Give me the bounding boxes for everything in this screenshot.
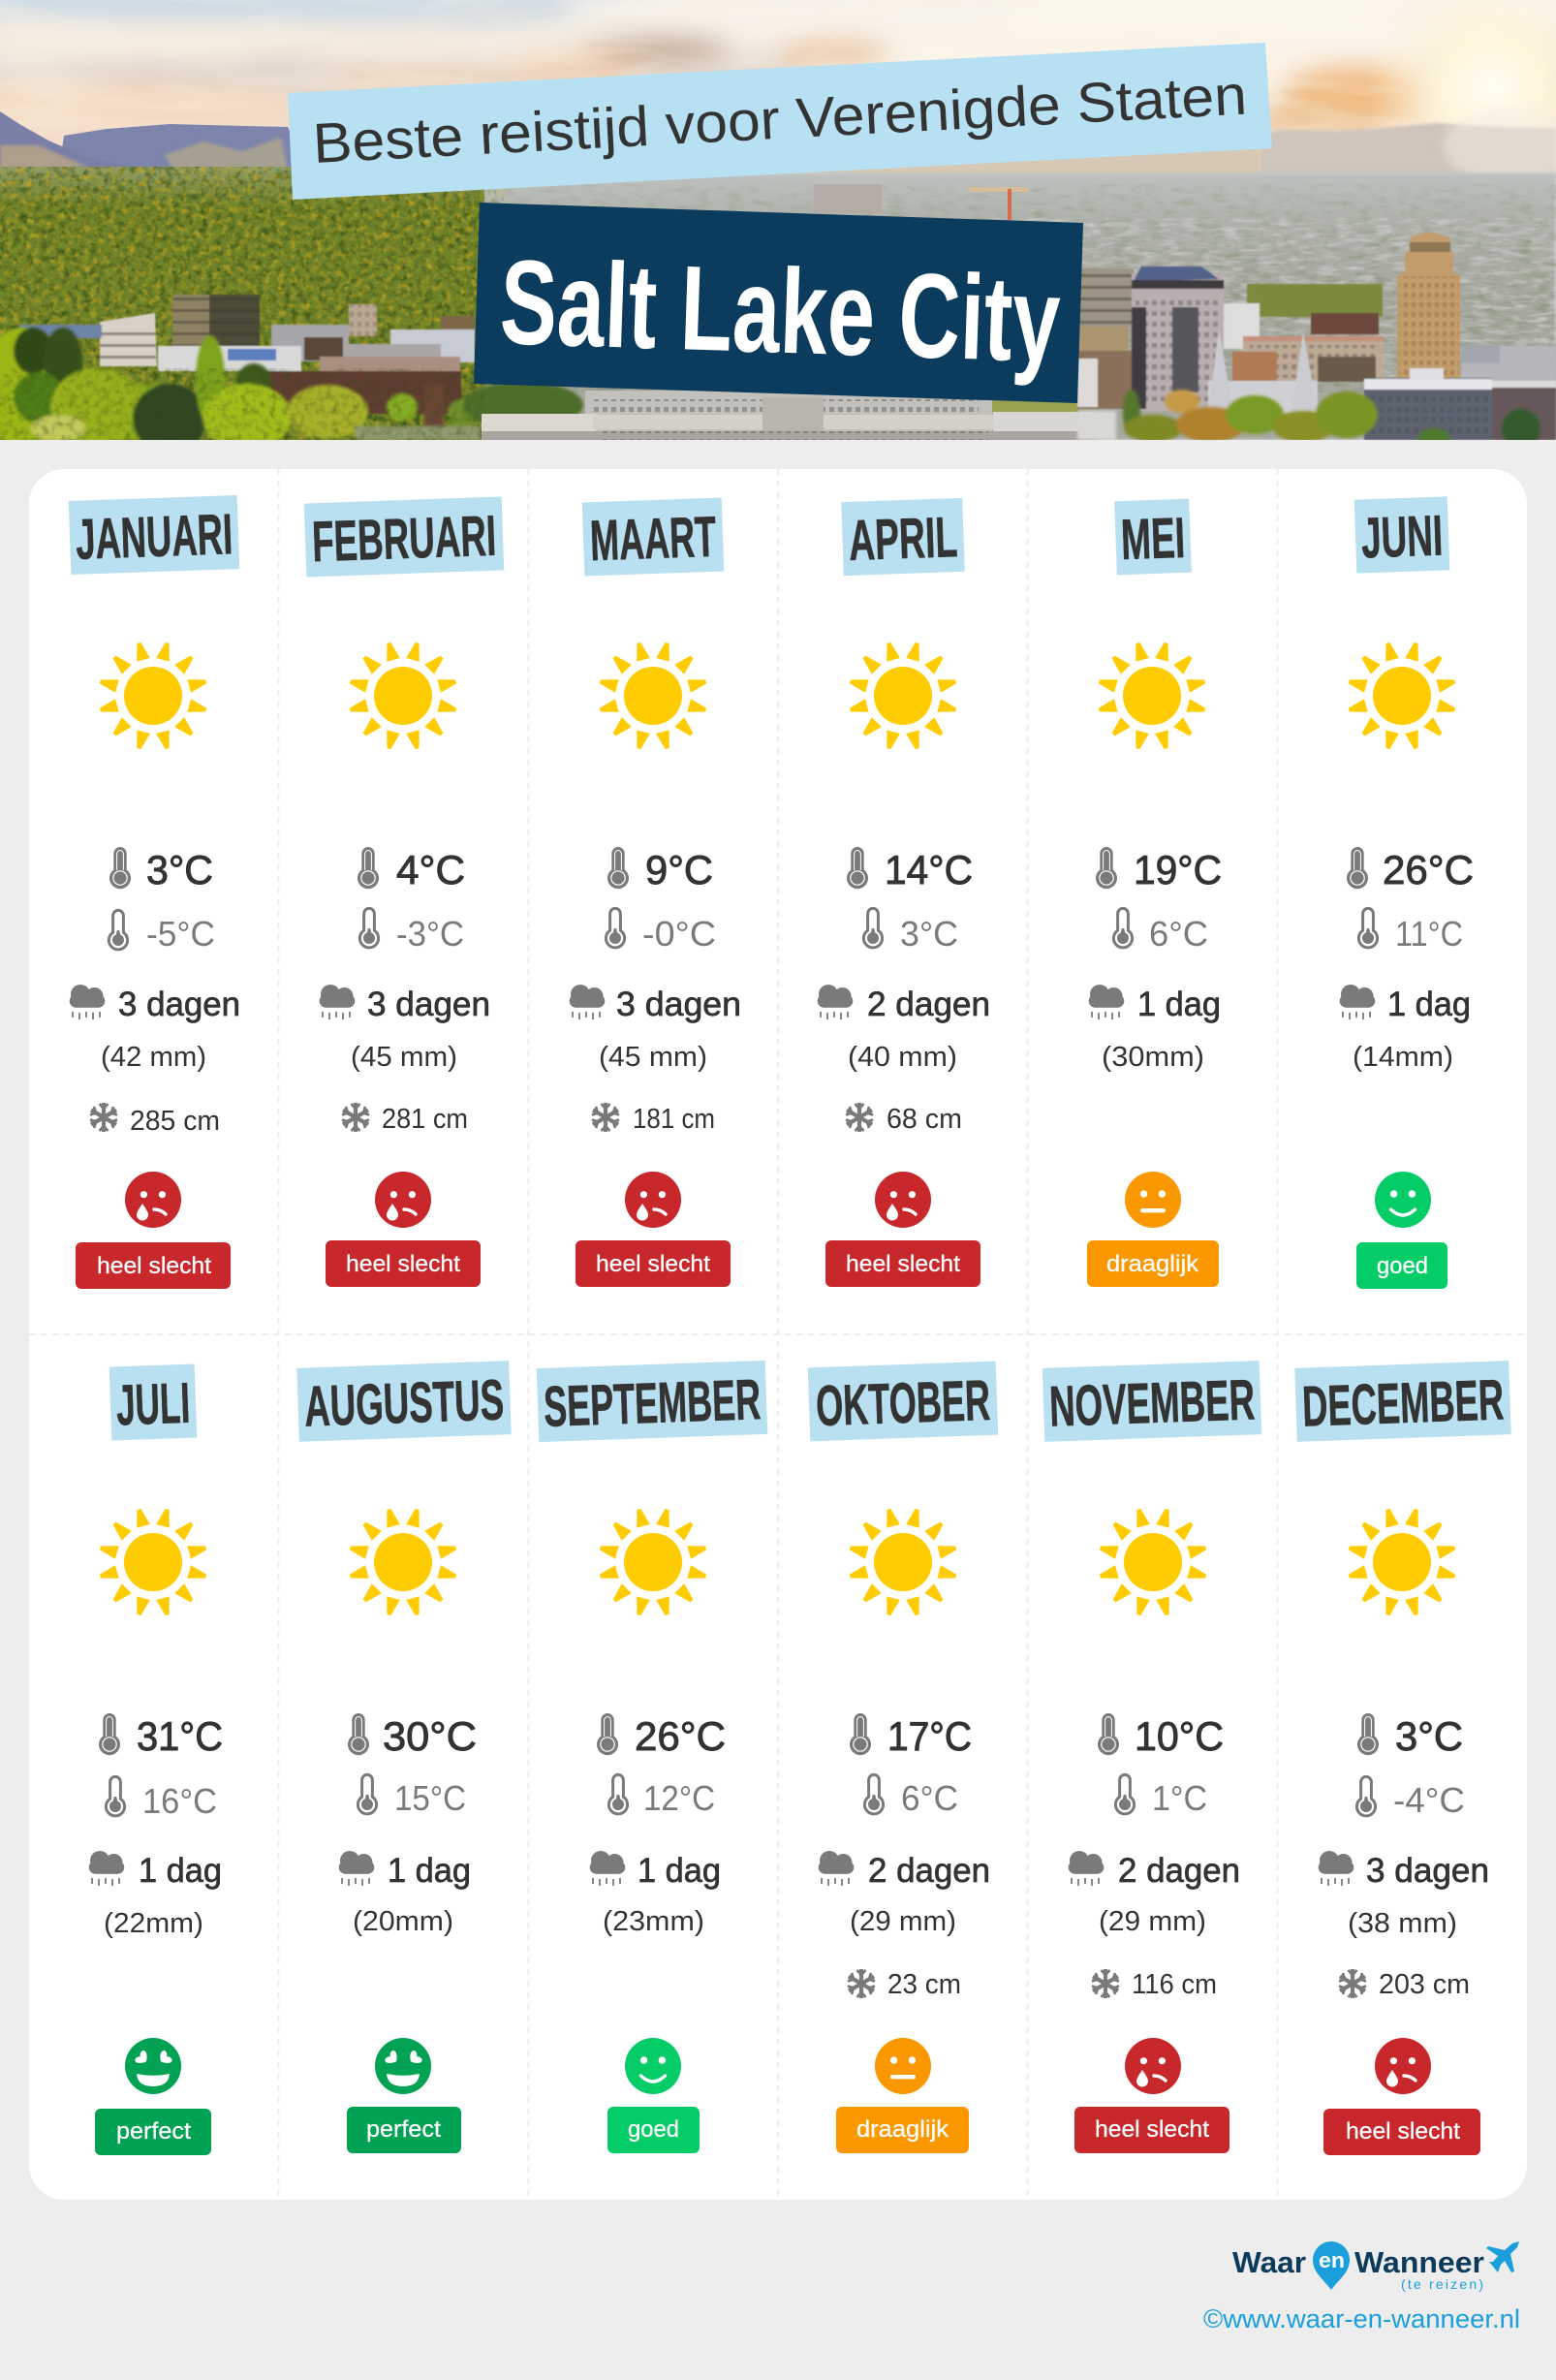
panel: november [1043,1361,1261,2153]
min temperature: 6°C [1149,914,1208,954]
month label: januari [69,495,239,575]
month label: oktober: OKTOBER [815,1368,991,1438]
month label: juli: JULI [115,1371,191,1437]
rainfall: (20mm) [353,1906,453,1937]
month label: oktober [808,1362,998,1441]
max temperature: 3°C [146,847,213,892]
rain days: 2 dagen [1118,1852,1240,1890]
rain days: 2 dagen [868,1852,990,1890]
icon: rain [590,1851,625,1886]
panel: juli [89,1363,223,2155]
max temperature: 19°C [1134,847,1222,892]
logo wordmark right: Wanneer [1354,2245,1484,2279]
min temperature: 15°C [394,1778,466,1818]
max temperature: 26°C [635,1713,726,1759]
rainfall: (14mm) [1353,1042,1453,1073]
trees right foreground [1077,390,1540,448]
rainfall: (40 mm) [848,1042,957,1073]
max temperature: 30°C [383,1713,477,1759]
icon: rating face [1125,2038,1181,2094]
calendar card [29,469,1527,2200]
rain days: 1 dag [638,1852,721,1890]
snowfall: 23 cm [887,1969,961,2000]
snowfall: 116 cm [1132,1969,1217,2000]
website url: ©www.waar-en-wanneer.nl [1203,2304,1520,2333]
icon: map pin [1313,2241,1350,2290]
rainfall: (45 mm) [599,1042,707,1073]
rating badge: heel slecht [846,1251,960,1277]
rating badge [576,1240,731,1287]
rain days: 1 dag [1137,986,1221,1023]
rainfall: (23mm) [603,1906,704,1937]
panel: juni [1340,496,1474,1289]
min temperature: 6°C [901,1778,958,1818]
icon: sun [349,1508,457,1616]
month label: januari: JANUARI [75,502,233,572]
icon: max temperature [1098,1713,1119,1755]
rating badge [1087,1240,1219,1287]
month label: maart [582,498,724,576]
icon: rain [1069,1851,1104,1886]
icon: max temperature [358,847,379,889]
icon: min temperature [1113,908,1133,948]
month label: mei: MEI [1120,506,1186,572]
max temperature: 31°C [137,1713,223,1759]
rain days: 1 dag [1387,986,1471,1023]
header photo: Salt Lake City skyline [0,0,1556,454]
icon: min temperature [106,1776,125,1816]
icon: sun [349,642,457,750]
icon: max temperature [99,1713,120,1755]
min temperature: 1°C [1152,1778,1207,1818]
icon: min temperature [1356,1776,1376,1816]
rating badge [1074,2107,1229,2153]
rating badge [607,2107,700,2153]
rating badge: draaglijk [1106,1251,1199,1277]
icon: min temperature [864,1774,884,1814]
rating badge: heel slecht [1095,2116,1209,2143]
snowfall: 281 cm [382,1104,468,1135]
rainfall: (42 mm) [101,1042,206,1073]
icon: rain [1340,985,1375,1019]
icon: max temperature [1347,847,1368,889]
panel: april [818,498,990,1287]
logo wordmark left: Waar [1232,2245,1306,2279]
icon: min temperature [1115,1774,1135,1814]
rain days: 1 dag [139,1852,222,1890]
snowfall: 181 cm [633,1104,715,1135]
panel: mei [1087,499,1222,1287]
panel: oktober [808,1362,998,2153]
icon: max temperature [847,847,868,889]
min temperature: 16°C [142,1781,217,1821]
rainfall: (38 mm) [1348,1908,1457,1939]
icon: sun [1098,642,1206,750]
snowfall: 203 cm [1379,1969,1470,2000]
snowfall: 285 cm [130,1106,220,1137]
icon: max temperature [607,847,629,889]
max temperature: 17°C [887,1713,972,1759]
panel: december [1294,1361,1511,2155]
icon: rain [1319,1851,1354,1886]
icon: min temperature [109,910,128,950]
logo tagline: (te reizen) [1401,2276,1483,2292]
icon: snow [90,1103,117,1132]
icon: min temperature [863,908,883,948]
month label: februari [304,496,504,578]
icon: max temperature [348,1713,369,1755]
max temperature: 9°C [645,847,713,892]
icon: max temperature [109,847,131,889]
icon: rating face [1375,1172,1431,1228]
icon: rating face [125,1172,181,1228]
icon: rain [819,1851,854,1886]
panel: september [537,1361,767,2153]
month label: september: SEPTEMBER [543,1367,762,1439]
rain days: 1 dag [388,1852,471,1890]
icon: rain [70,985,105,1019]
panel: augustus [296,1361,512,2153]
rain days: 2 dagen [867,986,990,1023]
max temperature: 4°C [396,847,465,892]
logo: Waar en Wanneer [1232,2241,1519,2292]
icon: sun [1099,1508,1207,1616]
max temperature: 14°C [885,847,973,892]
ground [0,167,504,440]
icon: rating face [875,1172,931,1228]
icon: min temperature [359,908,379,948]
rain days: 3 dagen [118,986,240,1023]
max temperature: 26°C [1383,847,1474,892]
icon: rating face [1125,1172,1181,1228]
month label: mei [1114,499,1192,575]
rating badge: goed [628,2116,679,2143]
month label: juli [109,1363,197,1441]
rain days: 3 dagen [1366,1852,1489,1890]
icon: rain [320,985,355,1019]
month label: maart: MAART [589,505,717,573]
month label: augustus [296,1361,512,1442]
icon: sun [99,1508,207,1616]
min temperature: -0°C [642,914,716,954]
icon: rating face [625,2038,681,2094]
rainfall: (29 mm) [850,1906,956,1937]
icon: rain [570,985,605,1019]
icon: snow [846,1103,873,1132]
icon: snow [592,1103,619,1132]
icon: airplane [1486,2241,1519,2272]
icon: sun [599,1508,707,1616]
min temperature: -5°C [146,914,215,954]
icon: sun [1348,642,1456,750]
rating badge: heel slecht [596,1251,710,1277]
min temperature: 3°C [900,914,958,954]
rating badge: perfect [116,2118,191,2145]
title banner: Salt Lake City [498,235,1062,388]
icon: rating face [625,1172,681,1228]
icon: snow [342,1103,369,1132]
rating badge [95,2109,211,2155]
icon: max temperature [597,1713,618,1755]
month label: juni: JUNI [1360,504,1444,570]
icon: sun [599,642,707,750]
month label: september [537,1361,767,1442]
bottom centre building [585,391,992,431]
month label: november: NOVEMBER [1048,1367,1256,1439]
max temperature: 10°C [1135,1713,1224,1759]
snowfall: 68 cm [887,1104,962,1135]
icon: rain [339,1851,374,1886]
buildings right [1077,233,1556,440]
icon: sun [849,1508,957,1616]
max temperature: 3°C [1395,1713,1463,1759]
rating badge: heel slecht [346,1251,460,1277]
icon: rain [818,985,853,1019]
rain days: 3 dagen [367,986,490,1023]
rating badge [825,1240,980,1287]
title banner [474,203,1083,403]
month label: februari: FEBRUARI [311,504,497,574]
icon: rating face [875,2038,931,2094]
icon: snow [1339,1969,1366,1998]
rainfall: (45 mm) [351,1042,457,1073]
rainfall: (22mm) [104,1908,203,1939]
icon: rain [1089,985,1124,1019]
icon: min temperature [358,1774,377,1814]
month label: juni [1354,496,1449,574]
icon: rating face [125,2038,181,2094]
rating badge [836,2107,969,2153]
subtitle banner: Beste reistijd voor Verenigde Staten [311,64,1248,175]
icon: rating face [375,2038,431,2094]
min temperature: 11°C [1395,914,1463,954]
icon: max temperature [1096,847,1117,889]
month label: november [1043,1361,1261,1442]
icon: rating face [1375,2038,1431,2094]
buildings left [19,295,475,414]
icon: snow [848,1969,875,1998]
icon: sun [99,642,207,750]
rating badge: heel slecht [97,1253,211,1279]
month label: april [841,498,965,576]
icon: sun [1348,1508,1456,1616]
rating badge [76,1242,231,1289]
month label: april: APRIL [848,505,958,573]
rainfall: (30mm) [1102,1042,1204,1073]
rating badge [1323,2109,1480,2155]
icon: rating face [375,1172,431,1228]
mountains [1260,123,1556,178]
rating badge: heel slecht [1346,2118,1460,2145]
rain days: 3 dagen [616,986,741,1023]
rating badge [347,2107,461,2153]
rating badge [326,1240,481,1287]
icon: min temperature [1358,908,1378,948]
pin word: en [1319,2248,1345,2272]
min temperature: -3°C [396,914,464,954]
icon: rain [89,1851,124,1886]
icon: max temperature [850,1713,871,1755]
rating badge: perfect [366,2116,441,2143]
icon: min temperature [608,1774,628,1814]
min temperature: 12°C [643,1778,715,1818]
rating badge: draaglijk [856,2116,949,2143]
month label: augustus: AUGUSTUS [303,1367,505,1439]
min temperature: -4°C [1393,1780,1465,1820]
icon: sun [849,642,957,750]
rating badge: goed [1377,1253,1428,1279]
trees left foreground [0,328,583,454]
icon: max temperature [1357,1713,1379,1755]
subtitle banner [288,43,1272,200]
panel: februari [304,496,504,1287]
rainfall: (29 mm) [1099,1906,1206,1937]
rating badge [1356,1242,1447,1289]
icon: min temperature [606,908,625,948]
grid lines [29,469,1527,2200]
panel: maart [570,498,741,1287]
panel: januari [69,495,240,1289]
icon: snow [1092,1969,1119,1998]
